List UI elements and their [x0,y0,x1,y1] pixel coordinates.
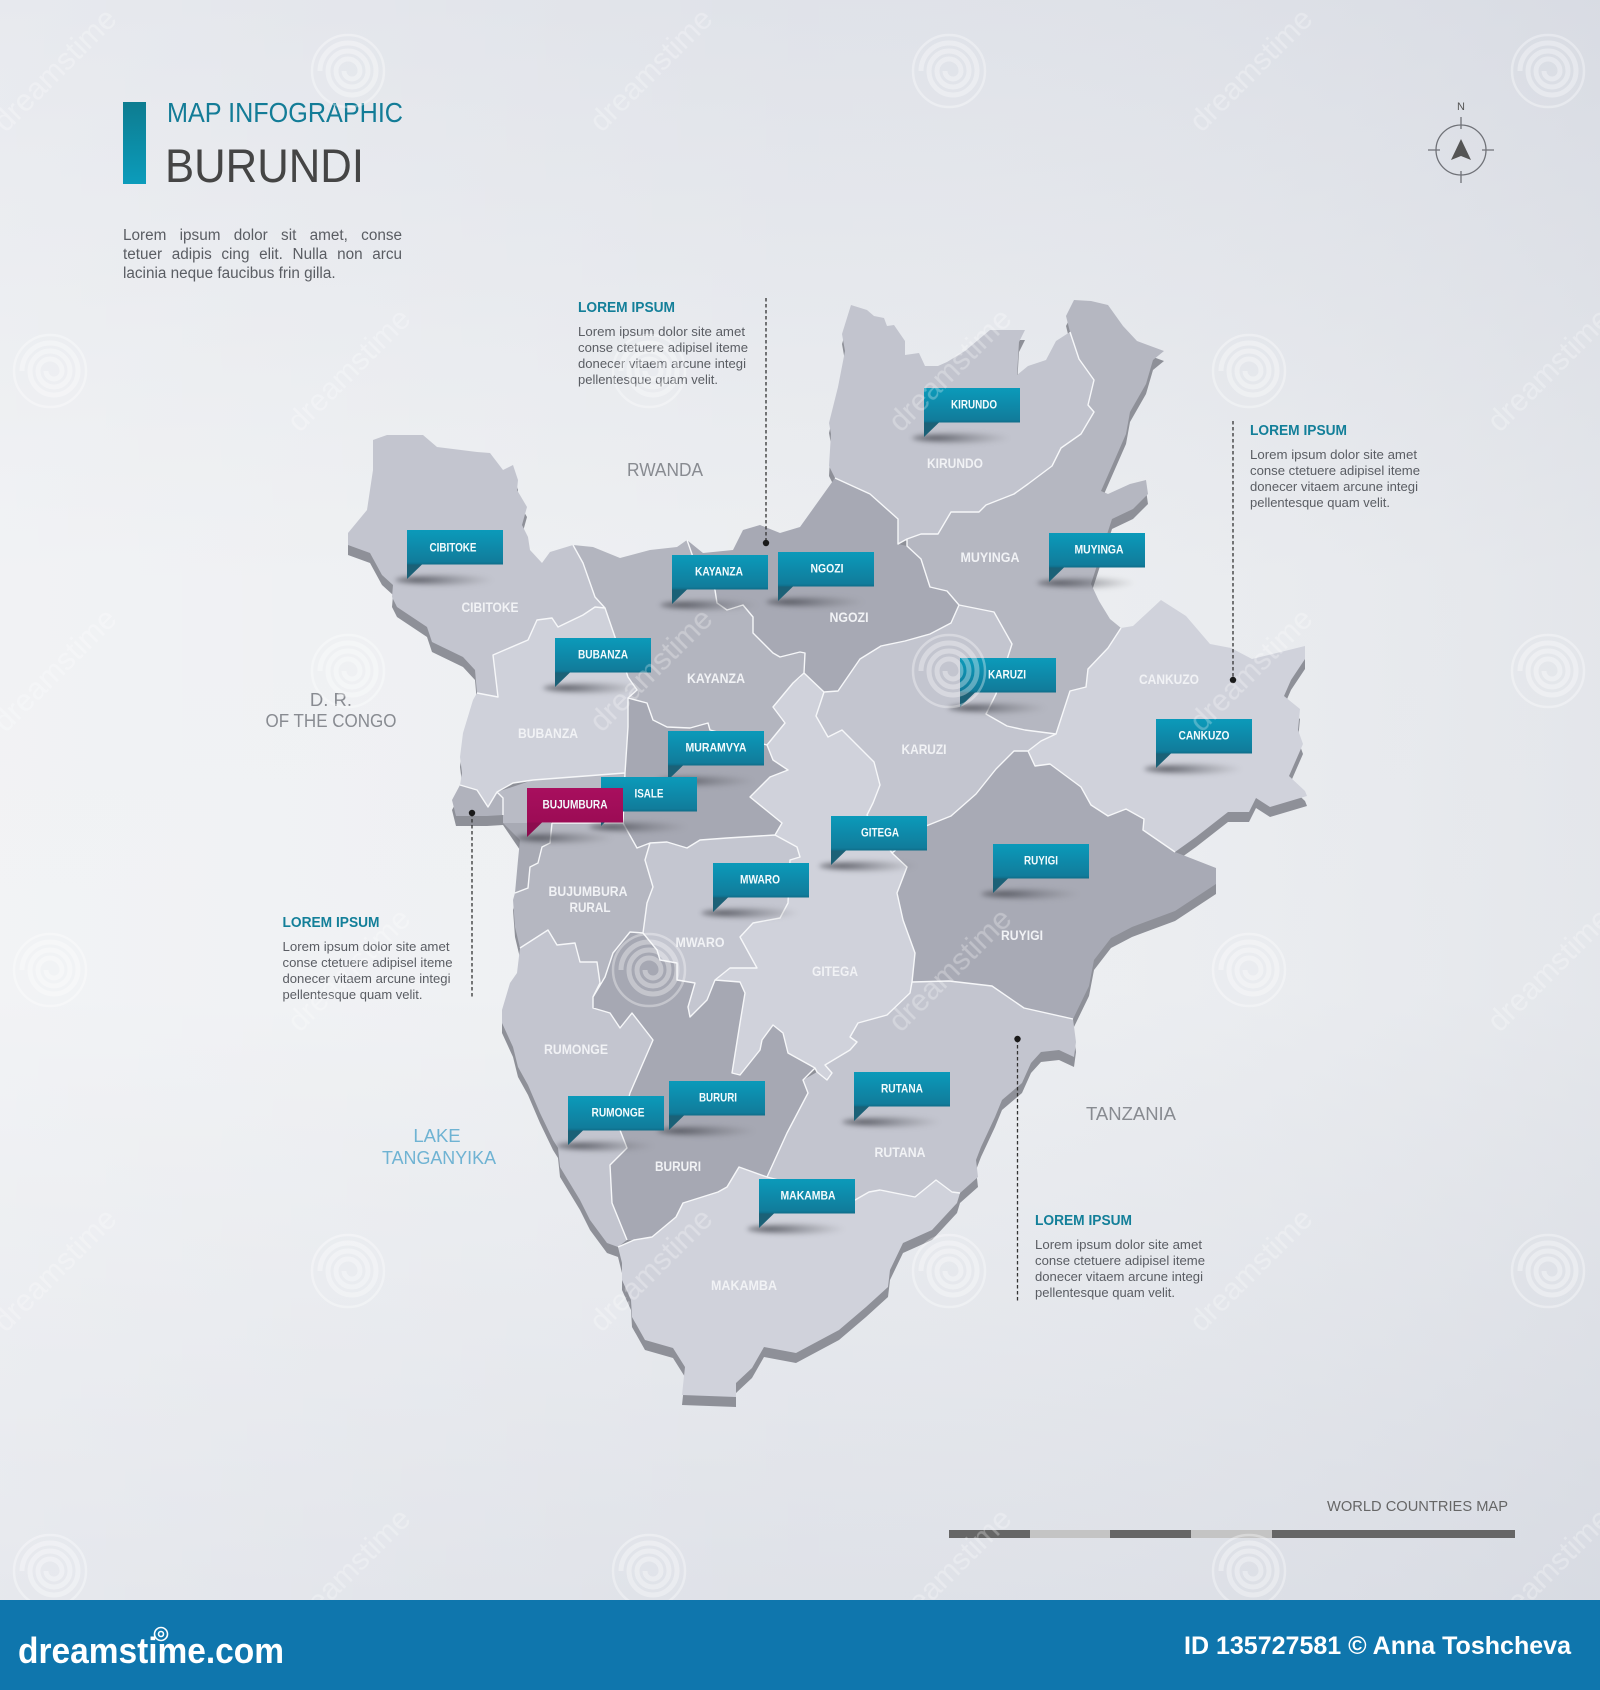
callout body: pellentesque quam velit. [1035,1285,1175,1300]
neighbouring country: D.R. of the Congo: OF THE CONGO [266,710,396,731]
callout body: donecer vitaem arcune integi [1250,479,1418,494]
map 3D side extrusion [348,310,1307,1407]
watermark text: dreamstime [583,2,719,138]
pin: Cibitoke [395,530,503,586]
region: Mwaro [643,835,800,1017]
region: Karuzi [816,605,1056,853]
pin: Muramvya [656,731,764,787]
callout body: donecer vitaem arcune integi [282,971,451,986]
callout body: conse ctetuere adipisel iteme [578,340,748,355]
title: Burundi: BURUNDI [165,139,364,192]
neighbouring country: D.R. of the Congo [266,689,396,731]
pin: Cankuzo: CANKUZO [1178,730,1230,742]
footer logo text: dreamstime.com [18,1630,284,1671]
callout body: conse ctetuere adipisel iteme [1035,1253,1205,1268]
region: Muyinga [907,300,1164,734]
label: Bujumbura Rural [548,884,628,915]
pin: Muyinga [1037,533,1145,589]
watermark text: dreamstime [882,1502,1018,1638]
pin: Cankuzo [1144,719,1252,775]
watermark text: dreamstime [281,1502,417,1638]
neighbouring country: Tanzania: TANZANIA [1086,1103,1177,1124]
pin: Bubanza: BUBANZA [578,650,628,662]
label: Ngozi: NGOZI [830,610,868,625]
callout heading: LOREM IPSUM [1035,1213,1132,1229]
watermark text: dreamstime [281,302,417,438]
callout leader line [1230,421,1236,683]
footer credit: ID 135727581 © Anna Toshcheva [1184,1632,1572,1660]
caption: World Countries Map: WORLD COUNTRIES MAP [1327,1498,1508,1515]
pin: Muramvya: MURAMVYA [686,742,746,754]
region: Bujumbura Mairie [452,785,503,816]
pin: Karuzi [948,658,1056,714]
callout body: conse ctetuere adipisel iteme [282,955,452,970]
callout: top centre [578,298,769,546]
callout body: donecer vitaem arcune integi [1035,1269,1203,1284]
watermark text: dreamstime [583,602,719,738]
label: Bubanza: BUBANZA [518,726,578,741]
region: Cankuzo [1028,600,1307,852]
region: Cibitoke [348,435,605,697]
region: Muramvya [623,698,788,848]
pin: Gitega: GITEGA [861,828,899,840]
pin: Kayanza [660,555,768,611]
watermark text: dreamstime [882,302,1018,438]
callout body: conse ctetuere adipisel iteme [1250,463,1420,478]
label: Makamba: MAKAMBA [711,1278,777,1293]
neighbouring country: Rwanda: RWANDA [627,459,704,480]
callout leader line [763,298,769,546]
label: Cankuzo: CANKUZO [1139,672,1199,687]
region: Bujumbura Rural [513,823,653,983]
callout heading: LOREM IPSUM [578,300,675,316]
label: Bujumbura Rural: BUJUMBURA [548,884,628,899]
callout body: pellentesque quam velit. [578,372,718,387]
pin: Kirundo: KIRUNDO [951,400,997,412]
callout body: Lorem ipsum dolor site amet [282,939,450,954]
icon: compass: N [1457,101,1465,113]
region labels [462,456,1199,1293]
watermark text: dreamstime [1183,2,1319,138]
pin: Ngozi [766,552,874,608]
map of Burundi [348,300,1307,1407]
title accent bar [123,102,146,184]
pin: Isale: ISALE [634,788,664,800]
pin: Rumonge: RUMONGE [592,1108,645,1120]
pin: Mwaro: MWARO [740,874,780,886]
callout: right [1230,421,1420,683]
water label: Lake Tanganyika: TANGANYIKA [382,1147,497,1168]
callout leader line [1014,1036,1021,1302]
callout: left [282,810,475,1002]
callout body: pellentesque quam velit. [1250,495,1390,510]
pin: Kayanza: KAYANZA [695,566,743,578]
pin: Ngozi: NGOZI [810,564,844,576]
label: Cibitoke: CIBITOKE [462,600,518,615]
pin: Rutana [842,1072,950,1128]
pin: Makamba: MAKAMBA [780,1190,836,1202]
water label: Lake Tanganyika [382,1125,497,1168]
callout body: Lorem ipsum dolor site amet [1250,447,1417,462]
region: Kayanza [573,540,805,745]
label: Mwaro: MWARO [676,935,724,950]
intro paragraph: lacinia neque faucibus frin gilla. [123,265,336,282]
region: Makamba [618,1167,960,1397]
watermark text: dreamstime [882,902,1018,1038]
pin: Bubanza [543,638,651,694]
footer bar [0,1600,1600,1690]
callout heading: LOREM IPSUM [282,915,380,931]
pin: Bujumbura (highlighted) [515,788,623,844]
callout body: Lorem ipsum dolor site amet [1035,1237,1202,1252]
pin: Rutana: RUTANA [881,1084,923,1096]
icon: compass [1428,101,1494,183]
callout body: Lorem ipsum dolor site amet [578,324,745,339]
pin: Mwaro [701,863,809,919]
pin: Ruyigi [981,844,1089,900]
region: Rumonge [502,930,653,1247]
region: Rutana [767,981,1076,1200]
watermark text: dreamstime [583,1202,719,1338]
pin: Bururi [657,1081,765,1137]
watermark text: dreamstime [1183,1202,1319,1338]
pin: Bururi: BURURI [699,1092,737,1104]
intro paragraph: tetuer adipis cing elit. Nulla non arcu [123,246,402,263]
title: Map Infographic: MAP INFOGRAPHIC [167,97,403,128]
callout leader line [469,810,475,999]
pin: Bujumbura (highlighted): BUJUMBURA [542,800,608,812]
region: Ngozi [687,478,959,692]
pin: Gitega [819,816,927,872]
label: Karuzi: KARUZI [902,742,946,757]
region: Bujumbura coast strip [503,823,552,893]
region: Ruyigi [892,751,1216,1019]
pin: Karuzi: KARUZI [988,670,1026,682]
intro paragraph: Lorem ipsum dolor sit amet, conse [123,227,402,244]
water label: Lake Tanganyika: LAKE [413,1125,461,1146]
label: Muyinga: MUYINGA [960,550,1020,565]
pin: Kirundo [912,388,1020,444]
label: Kirundo: KIRUNDO [927,456,983,471]
label: Kayanza: KAYANZA [687,671,745,686]
region: Gitega [715,673,915,1080]
label: Rumonge: RUMONGE [544,1042,608,1057]
callout heading: LOREM IPSUM [1250,423,1347,439]
region: Bubanza [460,607,637,807]
callout body: donecer vitaem arcune integi [578,356,746,371]
pin: Rumonge [556,1096,664,1152]
neighbouring country: D.R. of the Congo: D. R. [310,689,352,710]
region: Bujumbura north strip [497,773,625,823]
callout: bottom right [1014,1036,1205,1302]
icon: footer logo spiral [154,1628,168,1640]
region: Bururi [593,932,815,1240]
label: Bururi: BURURI [655,1159,701,1174]
pin: Makamba [747,1179,855,1235]
label: Bujumbura Rural: RURAL [570,900,610,915]
watermark text: dreamstime [1183,602,1319,738]
watermark text: dreamstime [281,902,417,1038]
label: Ruyigi: RUYIGI [1001,928,1043,943]
pin: Ruyigi: RUYIGI [1024,856,1058,868]
pin: Cibitoke: CIBITOKE [430,542,477,554]
region: Kirundo [829,305,1094,544]
pin: Muyinga: MUYINGA [1074,544,1124,556]
intro paragraph [123,227,402,282]
pin: Isale [589,777,697,833]
callout body: pellentesque quam velit. [282,987,422,1002]
label: Gitega: GITEGA [812,964,858,979]
label: Rutana: RUTANA [874,1145,926,1160]
scale bar [949,1530,1515,1538]
